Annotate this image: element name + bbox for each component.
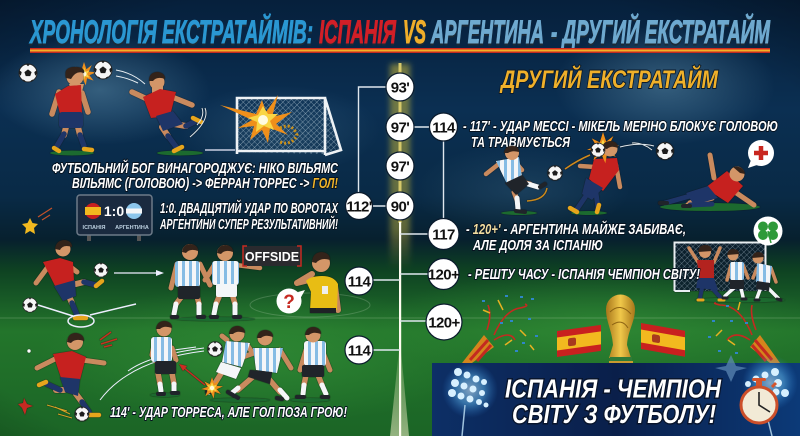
party popper right with confetti — [708, 302, 780, 363]
offside label: OFFSIDE — [245, 250, 299, 264]
icon: stopwatch — [741, 378, 777, 423]
champion banner: СВІТУ З ФУТБОЛУ! — [512, 399, 716, 429]
timeline node 117: 117 — [432, 226, 455, 244]
goal with explosion — [205, 95, 341, 155]
text: remaining time: - РЕШТУ ЧАСУ - ІСПАНІЯ ЧЕМПІОН СВІТУ! — [468, 267, 700, 283]
timeline node 114 left lower — [345, 336, 373, 364]
referee — [297, 252, 338, 313]
goal scene with players — [674, 242, 785, 302]
title: ХРОНОЛОГІЯ ЕКСТРАТАЙМІВ: — [29, 14, 313, 50]
timeline node 114 left lower: 114 — [348, 342, 371, 360]
balls top left — [19, 61, 145, 85]
timeline node 97 lower: 97' — [391, 158, 409, 176]
player: Niko Williams header — [50, 67, 94, 156]
text: goal description — [52, 159, 338, 192]
timeline node 117 — [428, 218, 459, 250]
player: red shooter corner — [36, 240, 102, 318]
timeline node 90: 90' — [391, 198, 409, 216]
shot trail — [100, 347, 204, 400]
text: score note: 1:0. ДВАДЦЯТИЙ УДАР ПО ВОРОТАХ — [160, 199, 339, 217]
timeline node 112: 112' — [346, 198, 372, 216]
text: 120+ near goal: - 120+' - АРГЕНТИНА МАЙЖЕ ЗАБИВАЄ, — [466, 220, 686, 238]
timeline connectors — [358, 87, 444, 350]
heading: second extra time: ДРУГИЙ ЕКСТРАТАЙМ — [499, 64, 719, 94]
party popper left with confetti — [462, 295, 538, 363]
offside label — [243, 246, 301, 266]
timeline node 90 — [386, 192, 414, 220]
scoreboard — [77, 195, 152, 241]
timeline node 120+ upper: 120+ — [428, 266, 460, 284]
title: VS — [403, 14, 426, 50]
icon: clover bubble — [754, 216, 782, 246]
champion banner: ІСПАНІЯ - ЧЕМПІОН — [505, 374, 722, 404]
text: Messi shot — [463, 119, 778, 151]
scoreboard: ІСПАНІЯ — [83, 225, 105, 231]
timeline beam — [390, 63, 410, 436]
text: score note: АРГЕНТИНИ СУПЕР РЕЗУЛЬТАТИВНИЙ! — [159, 215, 338, 233]
timeline node 97 upper: 97' — [391, 120, 409, 136]
scoreboard: АРГЕНТИНА — [115, 225, 149, 231]
text: Messi shot: ТА ТРАВМУЄТЬСЯ — [471, 135, 570, 151]
timeline node 120+ lower — [426, 304, 462, 340]
title — [29, 14, 771, 53]
title: АРГЕНТИНА — [430, 14, 544, 50]
scoreboard: 1:0 — [104, 203, 124, 219]
title: ІСПАНІЯ — [319, 14, 396, 50]
text: score note — [159, 199, 339, 233]
player: Merino block — [570, 132, 674, 215]
flag right — [641, 323, 685, 357]
text: Torres offside: 114' - УДАР ТОРРЕСА, АЛЕ ГОЛ ПОЗА ГРОЮ! — [110, 405, 347, 421]
corner arc with ball — [23, 263, 136, 327]
player: Messi — [486, 146, 590, 215]
icon: question bubble: ? — [283, 292, 295, 313]
text: 120+ near goal: АЛЕ ДОЛЯ ЗА ІСПАНІЮ — [472, 238, 603, 254]
player: Torres shot — [18, 332, 117, 421]
timeline node 112 — [346, 192, 372, 220]
icon: question bubble — [276, 288, 305, 314]
timeline node 114 left upper: 114 — [348, 274, 371, 290]
text: 120+ near goal — [466, 220, 686, 254]
arrow to defenders — [114, 270, 164, 276]
champion banner — [432, 355, 800, 436]
text: goal description: ФУТБОЛЬНИЙ БОГ ВИНАГОРОДЖУЄ: НІКО ВІЛЬЯМС — [52, 159, 338, 177]
defenders offside pair — [171, 244, 260, 321]
defenders group — [150, 321, 330, 402]
icon: star — [22, 208, 52, 234]
timeline node 97 lower — [386, 152, 414, 180]
timeline node 93: 93' — [391, 80, 409, 96]
timeline node 114 right: 114 — [432, 120, 456, 136]
text: goal description: ВІЛЬЯМС (ГОЛОВОЮ) -> ФЕРРАН ТОРРЕС -> ГОЛ! — [72, 176, 338, 192]
trophy — [606, 294, 635, 363]
timeline node 93 — [386, 73, 414, 101]
timeline node 120+ upper — [428, 258, 460, 290]
player: injured slide — [660, 155, 760, 211]
timeline node 120+ lower: 120+ — [428, 314, 461, 332]
icon: medical bubble — [748, 140, 774, 168]
player: Torres kick — [132, 72, 206, 156]
timeline node 114 right — [430, 113, 458, 141]
flag left — [557, 325, 601, 357]
timeline node 97 upper — [386, 113, 414, 141]
timeline node 114 left upper — [345, 267, 373, 295]
